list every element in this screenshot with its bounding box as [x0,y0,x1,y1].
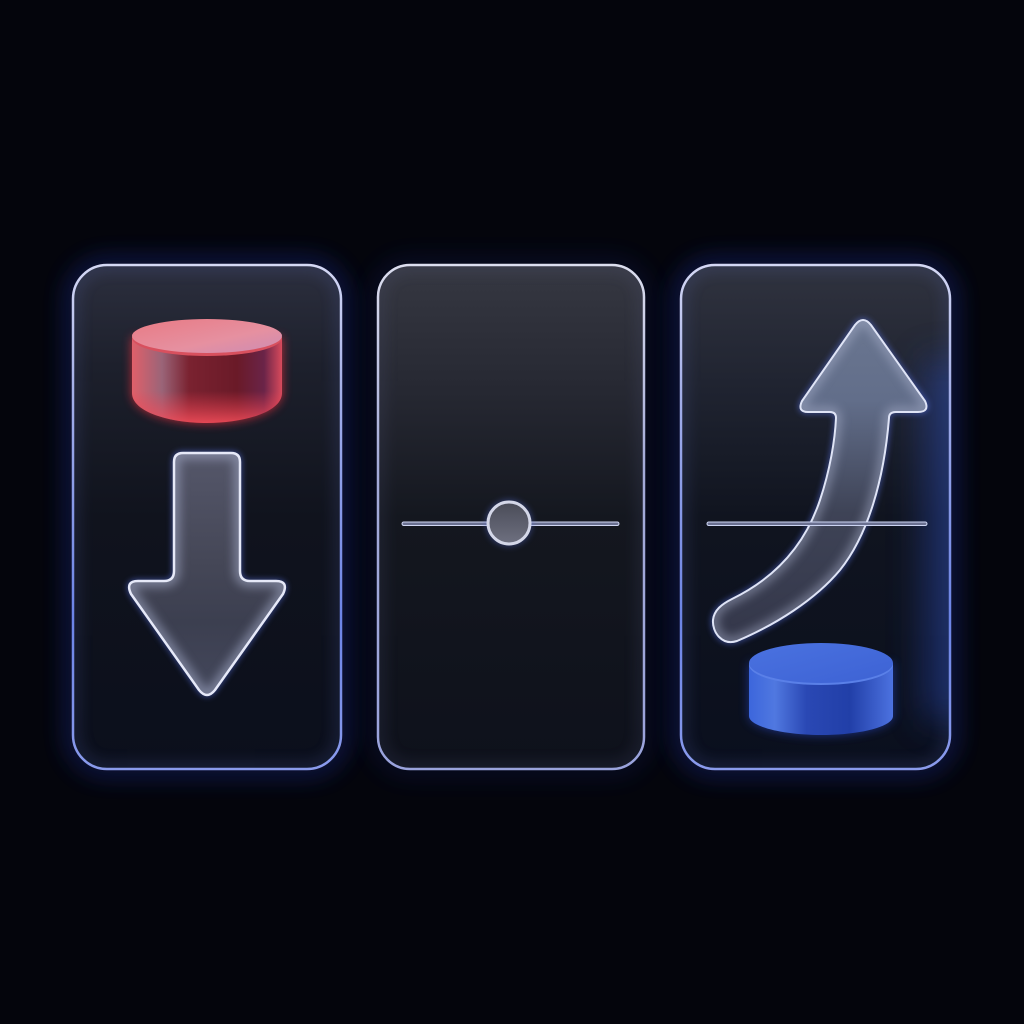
panel: right card with rising arrow and blue disc [681,265,965,769]
icon: blue disc [749,643,893,735]
icon: curved up arrow [713,320,926,642]
icon: level line [402,522,619,526]
panel: middle card with balance line [378,265,644,769]
panel: left card with red disc and down arrow [73,265,341,769]
icon: red disc [125,319,290,425]
icon: level line [707,522,927,526]
icon: down arrow [129,453,285,695]
icon: centre circle [485,499,533,547]
